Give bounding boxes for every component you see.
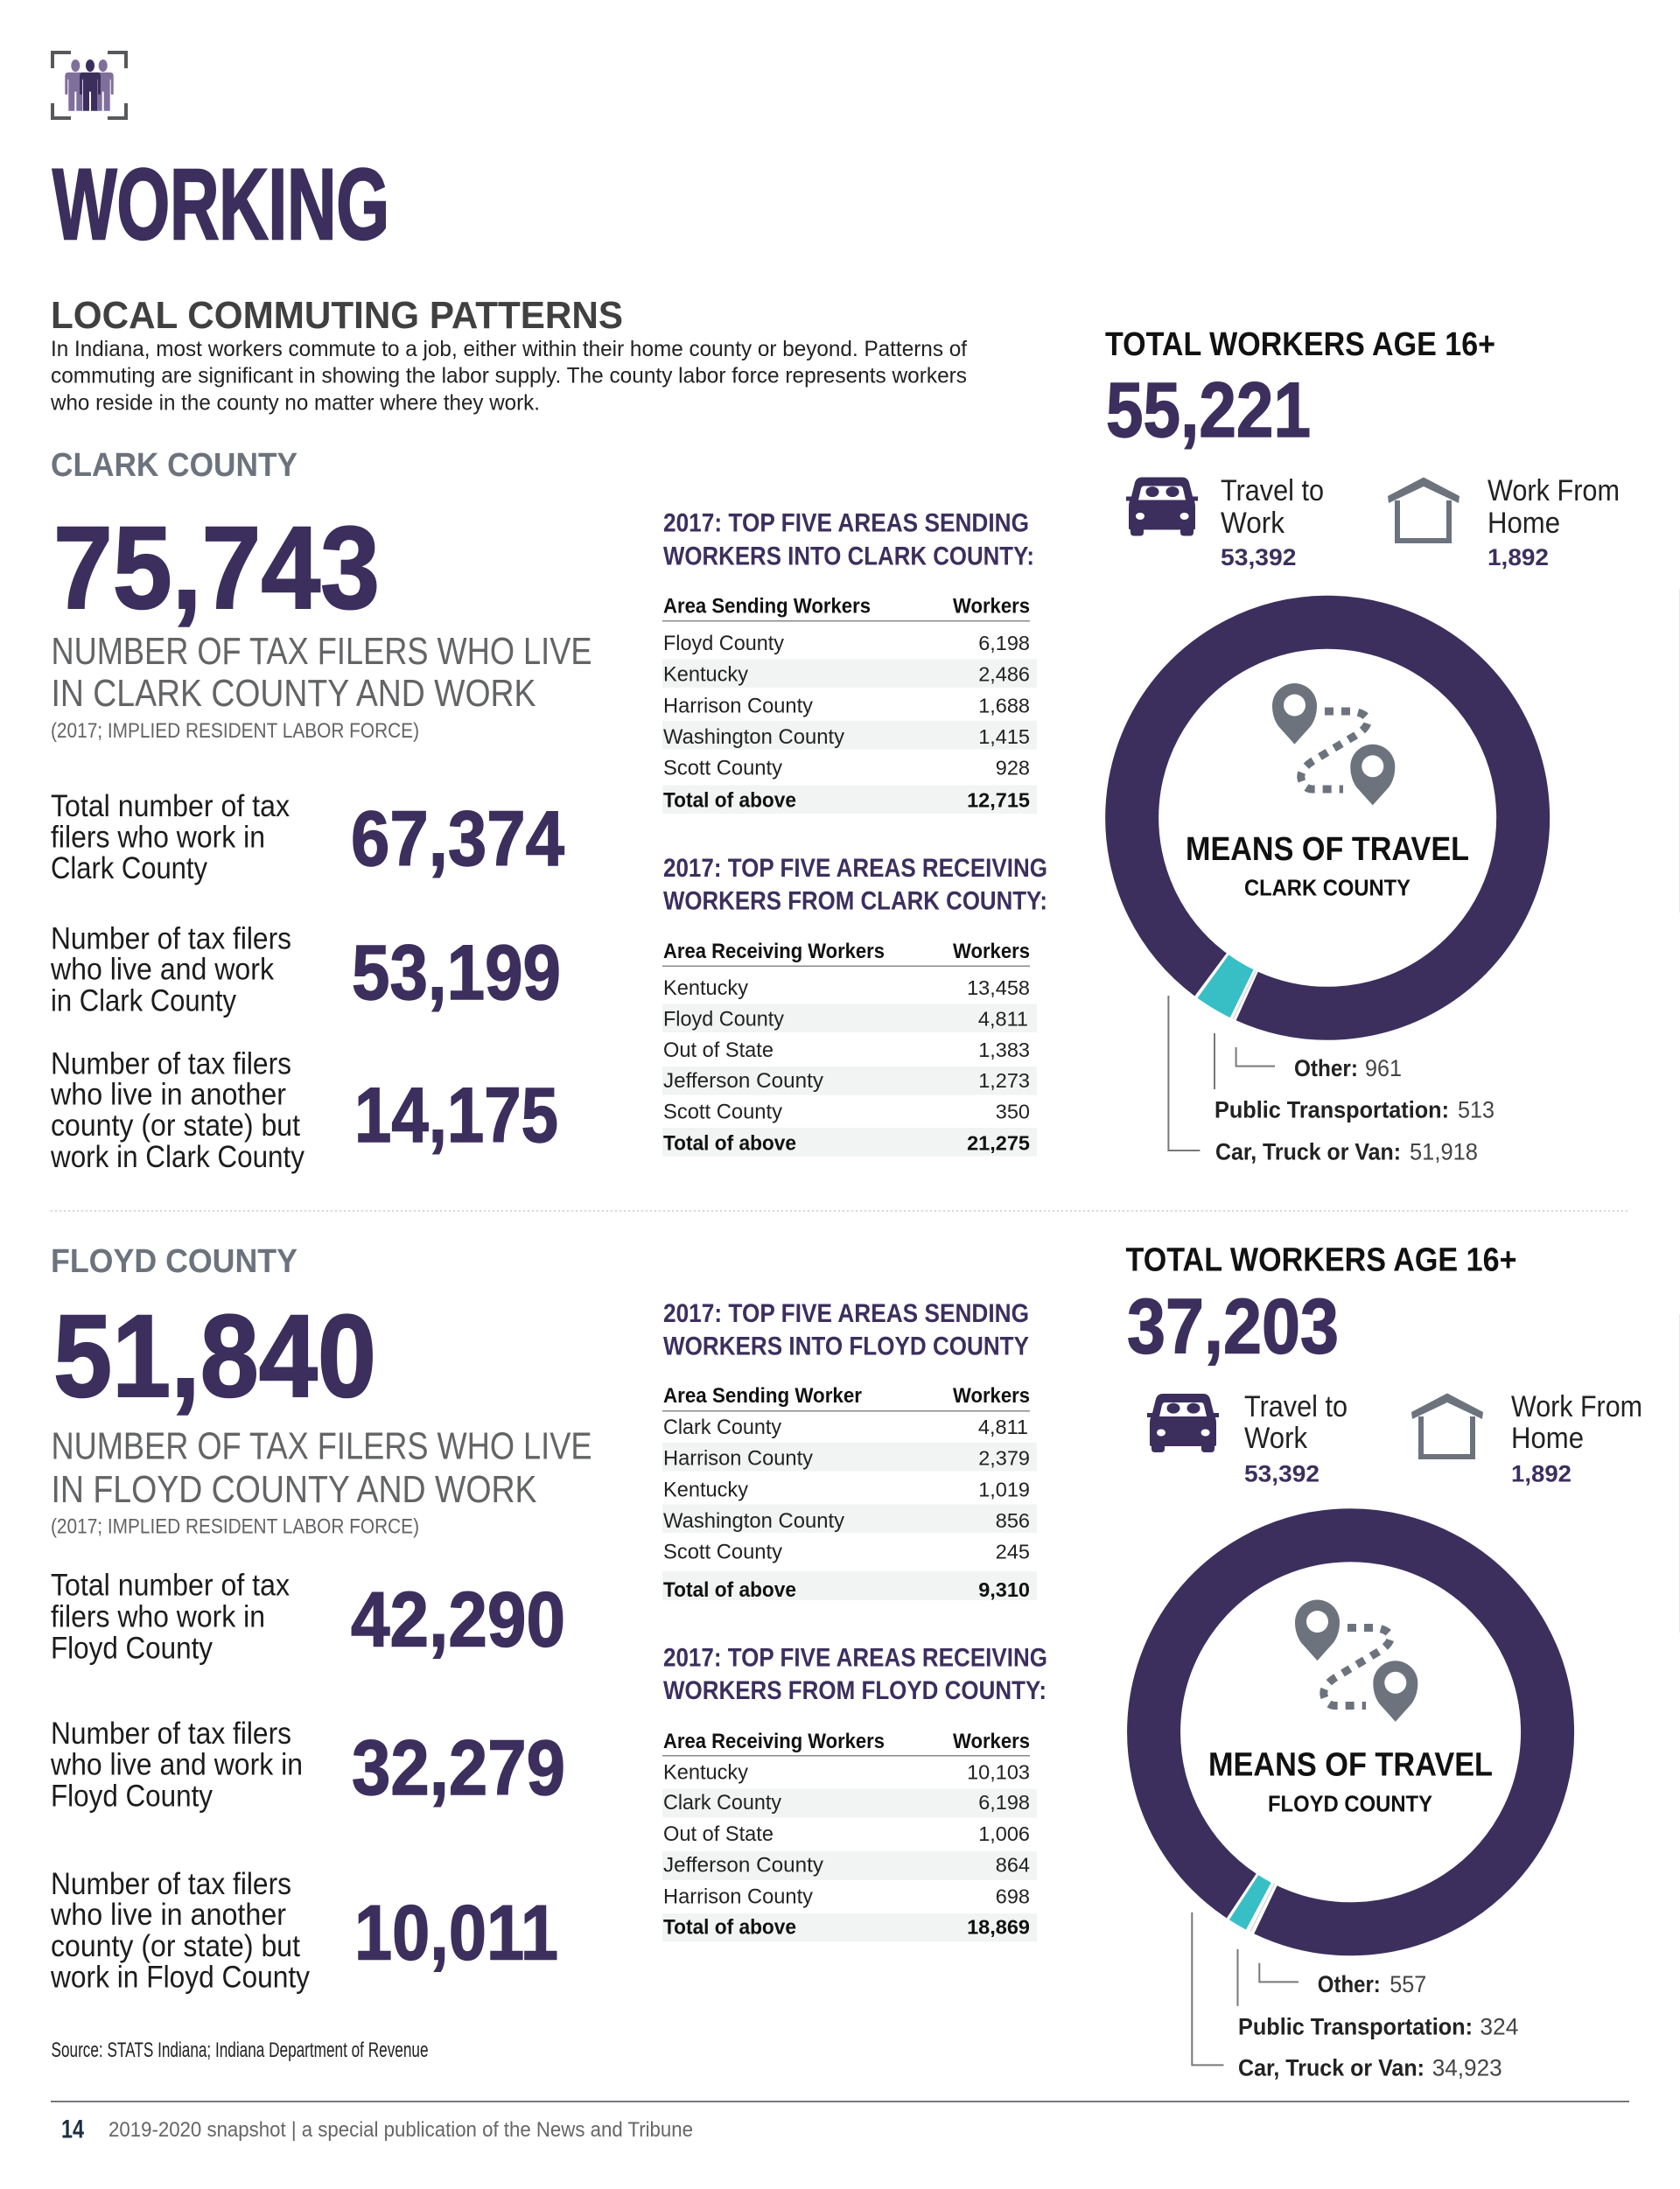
table: areas receiving workers from floyd: 1,006 [978,1822,1030,1845]
text: work from home: Home [1511,1422,1584,1455]
table: areas sending workers to floyd: Washington County [663,1509,844,1533]
heading: top five receiving from floyd [663,1644,1047,1705]
text: work in from elsewhere: county (or state) but [51,1108,300,1143]
text: live and work: Floyd County [51,1779,213,1813]
icon: group of workers in viewfinder [52,52,126,118]
panel: clark county tables [662,509,1047,1157]
text: live and work [50,1717,303,1813]
text: work in from elsewhere: county (or state) but [51,1929,300,1963]
table: areas receiving workers from floyd: Workers [953,1730,1030,1753]
legend: floyd travel modes: Other: [1318,1971,1381,1997]
table: areas sending workers to clark: Harrison County [663,694,813,717]
table: areas sending workers to floyd: Area Sending Worker [663,1384,862,1408]
table: areas sending workers to clark: Floyd County [663,632,784,655]
panel: floyd county tables [662,1299,1047,1941]
table: areas receiving workers from clark: Area Receiving Workers [663,940,885,963]
text: work in from elsewhere: work in Clark County [50,1140,304,1174]
panel: floyd county statistics [50,1243,592,1995]
table: areas sending workers to floyd: 856 [996,1509,1030,1532]
stat: 75,743: 75,743 [53,503,380,633]
heading: top five sending into floyd [663,1299,1029,1360]
legend: clark travel modes: Other: [1294,1055,1358,1081]
table: areas sending workers to clark: 928 [996,756,1030,779]
table: areas receiving workers from floyd: Area Receiving Workers [663,1730,885,1753]
stat caption: (2017; IMPLIED RESIDENT LABOR FORCE) [51,1514,419,1538]
text: work from home: 1,892 [1511,1460,1572,1486]
table: areas receiving workers from floyd: Kentucky [663,1760,748,1784]
legend: clark travel modes: 961 [1365,1055,1402,1081]
legend: floyd travel modes: Car, Truck or Van: [1238,2054,1424,2081]
stat: 37,203: 37,203 [1127,1283,1339,1370]
table: areas sending workers to clark: 1,688 [978,694,1030,717]
text: travel to work: Work [1244,1422,1308,1455]
heading: top five receiving from clark [663,854,1047,915]
table: areas receiving workers from floyd: Total of above [663,1916,796,1940]
table: areas sending workers to clark: 12,715 [967,789,1030,812]
stat caption: IN CLARK COUNTY AND WORK [51,672,536,715]
text: travel to work: Work [1221,507,1285,540]
legend: floyd travel modes [1192,1913,1518,2081]
publication line: 2019-2020 snapshot | a special publication of the News and Tribune [108,2118,693,2142]
icon: route between map pins [1272,683,1395,805]
text: means of travel floyd: FLOYD COUNTY [1268,1790,1432,1816]
table: areas receiving workers from floyd: Clark County [663,1791,781,1815]
text: live and work: Number of tax filers [51,922,291,955]
text: live and work: in Clark County [51,983,236,1018]
table: areas receiving workers from floyd: Harrison County [663,1885,813,1908]
text: work in from elsewhere [50,1867,310,1995]
legend: clark travel modes: 51,918 [1410,1139,1478,1165]
stat: 32,279: 32,279 [352,1724,565,1811]
legend: clark travel modes: Car, Truck or Van: [1215,1139,1401,1165]
text: work in from elsewhere: work in Floyd County [50,1960,310,1995]
legend: floyd travel modes: 557 [1390,1971,1426,1997]
text: work from home: Work From [1488,474,1620,507]
panel: clark county statistics [50,447,592,1174]
text: total tax filers: filers who work in [51,1600,265,1634]
table: areas sending workers to floyd: 1,019 [978,1478,1030,1500]
text: work from home: 1,892 [1488,544,1549,570]
text: travel to work: Travel to [1244,1390,1348,1423]
stat caption [51,1425,592,1538]
table: areas sending workers to clark: 2,486 [978,663,1030,686]
text: total tax filers: Total number of tax [51,1569,290,1603]
source note: Source: STATS Indiana; Indiana Department of Revenue [51,2039,429,2062]
text: work from home: Home [1488,507,1560,540]
legend: clark travel modes [1168,996,1494,1165]
heading: top five sending into floyd: WORKERS INTO FLOYD COUNTY [663,1332,1029,1360]
heading: top five receiving from clark: WORKERS FROM CLARK COUNTY: [663,887,1047,915]
text: work in from elsewhere [50,1046,304,1174]
text: work in from elsewhere: who live in another [50,1078,286,1112]
heading: local commuting patterns: LOCAL COMMUTING PATTERNS [51,294,623,337]
text: travel to work [1221,474,1324,570]
title: WORKING [52,149,389,261]
text: live and work: who live and work [50,953,274,987]
stat: 67,374: 67,374 [351,794,564,882]
table: areas sending workers to floyd: Harrison County [663,1447,813,1471]
page number: 14 [61,2116,84,2144]
text: total tax filers: filers who work in [51,821,265,855]
table: areas receiving workers from clark [662,940,1037,1157]
stat caption: IN FLOYD COUNTY AND WORK [51,1468,537,1511]
icon: route between map pins [1295,1599,1418,1722]
table: areas sending workers to clark [662,595,1037,814]
stat caption [51,630,592,743]
text: travel to work [1244,1390,1348,1486]
table: areas sending workers to clark: 6,198 [978,632,1030,654]
table: areas receiving workers from clark: 4,811 [978,1008,1028,1031]
text: total tax filers [51,1569,290,1666]
table: areas sending workers to floyd: Scott County [663,1540,782,1564]
icon: car [1147,1394,1219,1452]
stat: 14,175: 14,175 [354,1071,558,1158]
panel: floyd county workers and means of travel [1125,1241,1642,2081]
stat caption: NUMBER OF TAX FILERS WHO LIVE [51,1425,592,1468]
legend: clark travel modes: 513 [1458,1097,1494,1123]
text: total tax filers [51,789,290,885]
heading: top five sending into floyd: 2017: TOP FIVE AREAS SENDING [663,1299,1029,1328]
table: areas receiving workers from floyd: 698 [996,1885,1030,1907]
table: areas sending workers to floyd: Total of above [663,1578,796,1602]
table: areas receiving workers from floyd: Jefferson County [663,1853,823,1877]
intro paragraph: who reside in the county no matter where they work. [50,390,540,415]
legend: floyd travel modes: 34,923 [1432,2054,1502,2081]
text: total tax filers: Total number of tax [51,789,290,823]
table: areas sending workers to clark: Total of above [663,789,796,813]
icon: house [1411,1393,1483,1457]
text: work in from elsewhere: Number of tax filers [51,1046,291,1081]
table: areas receiving workers from floyd: 864 [996,1853,1030,1876]
heading: clark county: CLARK COUNTY [51,447,298,484]
table: areas sending workers to floyd [662,1384,1037,1602]
heading: top five receiving from clark: 2017: TOP FIVE AREAS RECEIVING [663,854,1047,883]
table: areas receiving workers from clark: 13,458 [967,976,1030,999]
table: areas sending workers to floyd: 2,379 [978,1447,1030,1470]
text: work from home [1488,474,1620,570]
text: work from home [1511,1390,1642,1486]
text: total tax filers: Floyd County [51,1631,213,1666]
stat: 51,840: 51,840 [53,1291,376,1422]
text: work in from elsewhere: Number of tax filers [51,1867,291,1901]
stat: 53,199: 53,199 [352,928,561,1016]
stat caption: (2017; IMPLIED RESIDENT LABOR FORCE) [51,719,419,743]
table: areas sending workers to floyd: 245 [996,1540,1030,1563]
table: areas receiving workers from floyd [662,1730,1037,1941]
stat: 42,290: 42,290 [351,1576,565,1663]
stat: 55,221: 55,221 [1106,366,1311,453]
table: areas receiving workers from floyd: 6,198 [978,1791,1030,1814]
text: travel to work: 53,392 [1244,1460,1320,1486]
table: areas sending workers to clark: 1,415 [978,725,1030,748]
table: areas sending workers to clark: Washington County [663,725,844,749]
legend: floyd travel modes: 324 [1480,2014,1518,2040]
heading: top five sending into clark: WORKERS INTO CLARK COUNTY: [663,542,1034,570]
text: means of travel floyd [1208,1746,1493,1816]
heading: top five sending into clark: 2017: TOP FIVE AREAS SENDING [663,509,1029,538]
heading: top five receiving from floyd: 2017: TOP FIVE AREAS RECEIVING [663,1644,1047,1673]
heading: floyd county: FLOYD COUNTY [51,1243,298,1280]
text: live and work: Number of tax filers [51,1717,291,1751]
table: areas receiving workers from clark: 21,275 [967,1132,1030,1155]
text: means of travel floyd: MEANS OF TRAVEL [1208,1746,1493,1783]
icon: car [1126,478,1198,535]
icon: house [1388,478,1460,541]
table: areas receiving workers from clark: Out of State [663,1039,774,1062]
intro paragraph [50,337,967,415]
table: areas receiving workers from clark: 1,273 [978,1069,1030,1092]
text: live and work: who live and work in [50,1748,303,1781]
heading: top five sending into clark [663,509,1034,570]
intro paragraph: In Indiana, most workers commute to a job, either within their home county or beyond. Patterns of [51,337,967,361]
table: areas sending workers to floyd: 4,811 [978,1416,1028,1438]
legend: clark travel modes: Public Transportation: [1214,1097,1449,1123]
table: areas sending workers to floyd: Workers [953,1384,1030,1408]
table: areas receiving workers from floyd: Out of State [663,1822,774,1846]
text: means of travel clark: CLARK COUNTY [1244,875,1410,901]
heading: total workers clark: TOTAL WORKERS AGE 16+ [1105,326,1495,363]
table: areas receiving workers from clark: Jefferson County [663,1069,823,1093]
text: travel to work: 53,392 [1221,544,1297,570]
text: means of travel clark: MEANS OF TRAVEL [1186,831,1469,868]
donut chart: clark means of travel [1132,622,1523,1019]
table: areas receiving workers from clark: Total of above [663,1132,796,1156]
table: areas receiving workers from clark: Workers [953,940,1030,963]
table: areas receiving workers from clark: 1,383 [978,1039,1030,1061]
panel: clark county workers and means of travel [1105,326,1620,1165]
donut chart: floyd means of travel [1154,1535,1548,1932]
table: areas sending workers to clark: Workers [953,595,1030,619]
table: areas receiving workers from clark: Kentucky [663,976,748,1000]
stat caption: NUMBER OF TAX FILERS WHO LIVE [51,630,592,673]
footer [61,2116,693,2144]
text: travel to work: Travel to [1221,474,1324,507]
table: areas receiving workers from clark: 350 [996,1101,1030,1123]
table: areas sending workers to clark: Area Sending Workers [663,595,871,619]
text: live and work [50,922,291,1018]
table: areas receiving workers from clark: Scott County [663,1101,782,1124]
table: areas receiving workers from floyd: 10,103 [967,1760,1030,1783]
legend: floyd travel modes: Public Transportation: [1238,2014,1473,2040]
text: work in from elsewhere: who live in another [50,1898,286,1932]
table: areas sending workers to clark: Kentucky [663,663,748,687]
table: areas sending workers to floyd: 9,310 [978,1578,1030,1601]
table: areas sending workers to clark: Scott County [663,756,782,780]
text: means of travel clark [1186,831,1469,901]
table: areas sending workers to floyd: Kentucky [663,1478,748,1501]
text: work from home: Work From [1511,1390,1642,1423]
heading: top five receiving from floyd: WORKERS FROM FLOYD COUNTY: [663,1676,1046,1705]
table: areas receiving workers from clark: Floyd County [663,1008,784,1032]
text: total tax filers: Clark County [51,851,207,885]
table: areas sending workers to floyd: Clark County [663,1416,781,1439]
heading: total workers floyd: TOTAL WORKERS AGE 16+ [1125,1241,1517,1278]
stat: 10,011: 10,011 [354,1889,558,1976]
intro paragraph: commuting are significant in showing the labor supply. The county labor force represents workers [51,364,967,388]
table: areas receiving workers from floyd: 18,869 [967,1916,1030,1939]
